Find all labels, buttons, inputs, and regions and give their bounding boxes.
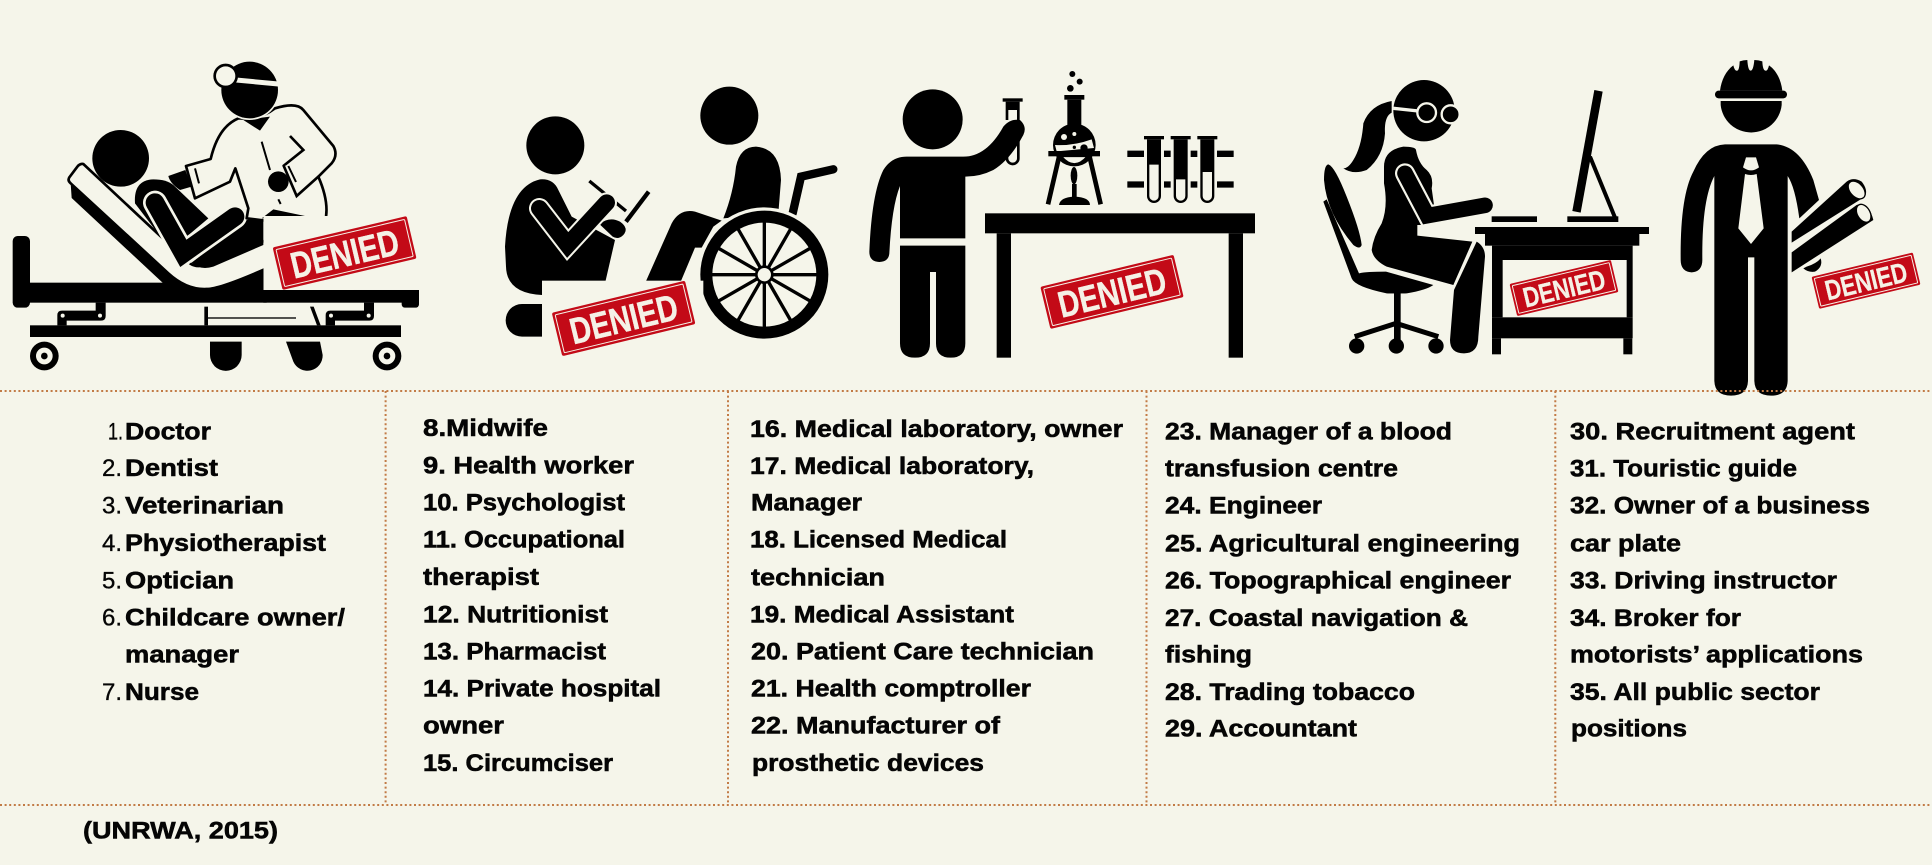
- text column: professions 8 to 15: [423, 415, 661, 777]
- body and necktie: [1681, 144, 1819, 396]
- text column: professions 1 to 7: 3.: [102, 492, 122, 519]
- text column: professions 30 to 35: positions: [1571, 716, 1687, 743]
- text column: professions 1 to 7: 4.: [102, 530, 122, 557]
- office chair: [1323, 164, 1444, 354]
- stamp: DENIED desk: DENIED: [1520, 264, 1608, 314]
- text column: professions 8 to 15: 14. Private hospital: [423, 676, 661, 703]
- text column: professions 16 to 22: 22. Manufacturer of: [751, 712, 1001, 739]
- stamp cover: [542, 281, 703, 344]
- stamp: DENIED doctor: DENIED: [287, 221, 403, 286]
- test tube rack: [1127, 136, 1234, 203]
- text column: professions 8 to 15: 12. Nutritionist: [423, 601, 608, 628]
- text column: professions 1 to 7: [102, 418, 345, 706]
- text column: professions 1 to 7: Veterinarian: [125, 492, 284, 519]
- seated note-taker: [505, 116, 649, 337]
- text column: professions 1 to 7: Physiotherapist: [125, 530, 326, 557]
- stamp: DENIED engineer: DENIED: [1822, 257, 1910, 306]
- text column: professions 30 to 35: 30. Recruitment agent: [1570, 419, 1855, 446]
- wheelchair user: [645, 87, 833, 342]
- text column: professions 1 to 7: 6.: [102, 605, 122, 632]
- stamp: DENIED laboratory: DENIED: [1054, 260, 1170, 326]
- text column: professions 16 to 22: 18. Licensed Medical: [750, 527, 1007, 554]
- text column: professions 16 to 22: [750, 416, 1124, 777]
- text column: professions 16 to 22: 17. Medical laboratory,: [750, 453, 1034, 480]
- text column: professions 16 to 22: 16. Medical laboratory, owner: [750, 416, 1124, 443]
- patient: [92, 130, 263, 268]
- text column: professions 30 to 35: 31. Touristic guide: [1570, 456, 1797, 483]
- text column: professions 23 to 29: 28. Trading tobacco: [1165, 679, 1415, 706]
- text column: professions 30 to 35: 32. Owner of a business: [1570, 493, 1870, 520]
- text column: professions 16 to 22: Manager: [751, 490, 862, 517]
- text column: professions 1 to 7: 7.: [102, 679, 122, 706]
- text column: professions 8 to 15: 11. Occupational: [423, 527, 625, 554]
- text column: professions 8 to 15: 15. Circumciser: [423, 750, 613, 777]
- text column: professions 23 to 29: 23. Manager of a blood: [1165, 419, 1452, 446]
- flask on stand: [1048, 71, 1101, 205]
- table: [985, 213, 1255, 358]
- text column: professions 23 to 29: 24. Engineer: [1165, 493, 1322, 520]
- text column: professions 30 to 35: motorists’ applications: [1570, 642, 1863, 669]
- text column: professions 16 to 22: 19. Medical Assistant: [750, 601, 1014, 628]
- text column: professions 23 to 29: 29. Accountant: [1165, 716, 1357, 743]
- icon: doctor treating patient on bed: [13, 60, 419, 371]
- text column: professions 8 to 15: owner: [423, 713, 505, 740]
- blueprint rolls: [1792, 178, 1874, 272]
- text column: professions 30 to 35: 33. Driving instructor: [1570, 568, 1837, 595]
- text column: professions 23 to 29: fishing: [1165, 642, 1252, 669]
- text column: professions 1 to 7: Nurse: [125, 679, 199, 706]
- desk with computer: [1475, 90, 1649, 354]
- text column: professions 1 to 7: Childcare owner/: [125, 605, 345, 632]
- text column: professions 1 to 7: 1.: [108, 418, 123, 445]
- text column: professions 8 to 15: 13. Pharmacist: [423, 638, 606, 665]
- icon: engineer with hard hat and blueprints: [1681, 60, 1874, 396]
- text column: professions 23 to 29: 27. Coastal navigation &: [1165, 605, 1468, 632]
- text column: professions 8 to 15: 9. Health worker: [423, 452, 635, 479]
- backrest and mattress: [69, 164, 267, 289]
- text column: professions 16 to 22: prosthetic devices: [752, 750, 984, 777]
- text column: professions 23 to 29: transfusion centre: [1165, 456, 1398, 483]
- text column: professions 16 to 22: 20. Patient Care technician: [751, 638, 1094, 665]
- icon: woman accountant at desk: [1323, 80, 1649, 354]
- bed frame: [13, 236, 419, 371]
- stamp cover: doctor: [264, 216, 354, 290]
- text column: professions 30 to 35: car plate: [1570, 531, 1681, 558]
- text column: professions 30 to 35: [1570, 419, 1870, 743]
- text column: professions 16 to 22: 21. Health comptroller: [751, 676, 1031, 703]
- text column: professions 16 to 22: technician: [751, 565, 885, 592]
- text column: professions 8 to 15: therapist: [423, 564, 539, 591]
- text column: professions 30 to 35: 35. All public sector: [1570, 679, 1820, 706]
- text column: professions 23 to 29: [1165, 419, 1520, 743]
- text column: professions 30 to 35: 34. Broker for: [1570, 605, 1741, 632]
- text column: professions 8 to 15: 8.Midwife: [423, 415, 548, 442]
- icon: health worker with wheelchair user: [505, 87, 833, 344]
- text column: professions 1 to 7: 2.: [102, 455, 122, 482]
- text column: professions 1 to 7: Dentist: [125, 455, 218, 482]
- text column: professions 1 to 7: Optician: [125, 567, 234, 594]
- text column: professions 1 to 7: manager: [125, 642, 240, 669]
- text column: professions 1 to 7: 5.: [102, 567, 122, 594]
- text column: professions 23 to 29: 26. Topographical engineer: [1165, 568, 1511, 595]
- text column: professions 1 to 7: Doctor: [125, 418, 211, 445]
- source citation: (UNRWA, 2015): [83, 817, 278, 844]
- doctor: [168, 60, 335, 222]
- text column: professions 8 to 15: 10. Psychologist: [423, 490, 625, 517]
- held test tube: [1003, 98, 1023, 164]
- woman figure: [1343, 80, 1485, 353]
- text column: professions 23 to 29: 25. Agricultural engineering: [1165, 531, 1520, 558]
- icon: laboratory technician at table: [869, 71, 1255, 358]
- technician figure: [869, 89, 1025, 358]
- hard hat and head: [1715, 60, 1787, 132]
- stamp: DENIED wheelchair: DENIED: [566, 287, 682, 352]
